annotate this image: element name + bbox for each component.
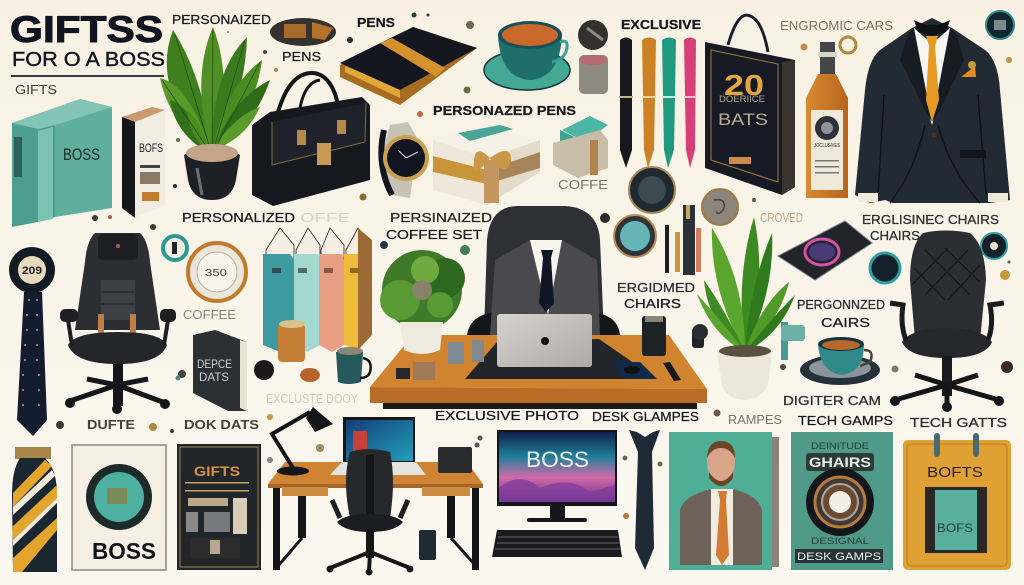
scattered labels: EXCLUSIVE PHOTO [435,409,579,423]
pen and tool set [665,205,701,275]
scattered labels: EXCLUSTE DOOY [266,392,359,406]
teal book set: BOSS [63,145,100,164]
design book [791,432,893,570]
wristwatch [381,122,429,198]
scattered labels: DUFTE [87,418,135,432]
teal badges [870,233,1007,283]
black gift bag: BATS [718,110,768,129]
pen set [619,38,696,168]
desk canister [642,316,666,356]
left chair [60,233,176,414]
scattered labels [87,13,1007,432]
teal ring [163,236,187,260]
title block [10,9,165,97]
Boss card [72,445,166,570]
Boss card: BOSS [92,538,156,564]
main desk [370,335,707,409]
monitor: BOSS [526,447,589,472]
orange leather pad: BOFTS [927,464,983,481]
gift box [433,124,540,205]
lens badge [614,215,656,257]
scattered labels: OFFE [300,211,350,225]
compass ornament [629,167,675,213]
laptop on lower desk [330,417,426,475]
scattered labels: DOK DATS [184,418,259,432]
laptop on main desk [497,314,592,367]
orange leather pad [903,433,1011,570]
dark ball and ornament [254,360,320,382]
book: Depce Dats: DEPCE [197,357,232,371]
book: Depce Dats [193,330,247,411]
design book: DESK GAMPS [797,551,881,563]
portrait book [669,432,779,570]
small plant on desk [380,250,465,354]
small stacked gift [553,116,608,178]
scattered labels: COFFEE SET [386,228,482,242]
office chair lower [326,449,414,576]
scattered labels: CHAIRS [624,297,681,311]
whisky bottle [806,42,848,198]
striped tie [12,447,57,572]
209 seal badge: 209 [22,265,42,277]
potted plant [160,27,270,200]
scattered labels: ENGROMIC CARS [780,19,893,33]
scattered labels: COFFE [558,178,608,192]
right chair [890,230,1004,412]
whisky bottle: JOCLUSIVES [814,143,841,149]
scattered labels: CAIRS [821,316,870,330]
scattered labels: PERSONAZED PENS [433,104,576,118]
scattered labels: TECH GATTS [910,416,1007,430]
Gifts book [177,444,261,570]
black gift bag: 20 [724,70,764,102]
lower desk scene [268,462,483,570]
copper ring [188,243,246,301]
scattered labels: ERGIDMED [617,281,695,295]
teal book set [12,99,112,227]
black notebook [340,27,477,105]
scattered labels: PERSONALIZED [182,211,295,225]
scattered labels: PENS [357,16,395,30]
engraved coin [702,189,738,225]
scattered labels: EXCLUSIVE [621,18,701,32]
coffee cup top [484,21,570,90]
book: Depce Dats: DATS [199,370,229,384]
tall product box: BOFS [139,141,163,155]
right plant [697,217,795,400]
design book: DEINITUDE [811,441,869,451]
scattered labels: COFFEE [183,308,236,322]
scattered labels: CHAIRS [870,229,920,243]
round badge top right [986,11,1014,39]
keyboard [492,530,622,557]
design book: GHAIRS [809,454,871,470]
gadget tablet box [778,221,872,280]
copper jar [278,320,305,362]
scattered labels: PERSONAIZED [172,13,271,27]
main office scene: chair with suited figure [467,206,620,335]
tall product box [122,107,165,218]
small leather wallet [270,18,336,46]
209 seal badge [9,247,55,293]
title block: GIFTSS [10,9,163,50]
dark mug [336,347,371,384]
navy necktie [629,430,660,570]
Gifts book: GIFTS [194,463,240,479]
scattered labels: TECH GAMPS [798,414,893,428]
binders [263,228,372,352]
copper ring: 350 [205,268,228,279]
black cube gadget and cup [419,447,472,560]
coffee cup lower [800,337,880,385]
black suit jacket [855,18,1010,203]
title block: GIFTS [15,82,57,97]
black gift bag: DOERIICE [719,94,765,104]
design book: DESIGNAL [811,536,869,546]
scattered labels: PENS [282,50,321,64]
black gift bag [705,15,795,195]
scattered labels: ERGLISINEC CHAIRS [862,213,999,227]
scattered labels: DESK GLAMPES [592,410,699,424]
scattered labels: RAMPES [728,413,782,427]
black handbag [252,73,370,206]
dark round ornament and small can [578,20,608,94]
title block: FOR O A BOSS [12,49,165,71]
dotted necktie [17,292,47,436]
orange leather pad: BOFS [937,521,973,535]
scattered labels: DIGITER CAM [783,394,881,408]
desk lamp [272,407,333,476]
small teal clamp gadget [692,322,805,360]
scattered labels: PERSINAIZED [390,211,492,225]
scattered labels: CROVED [760,211,803,225]
scattered labels: PERGONNZED [797,298,885,312]
monitor [497,430,617,522]
